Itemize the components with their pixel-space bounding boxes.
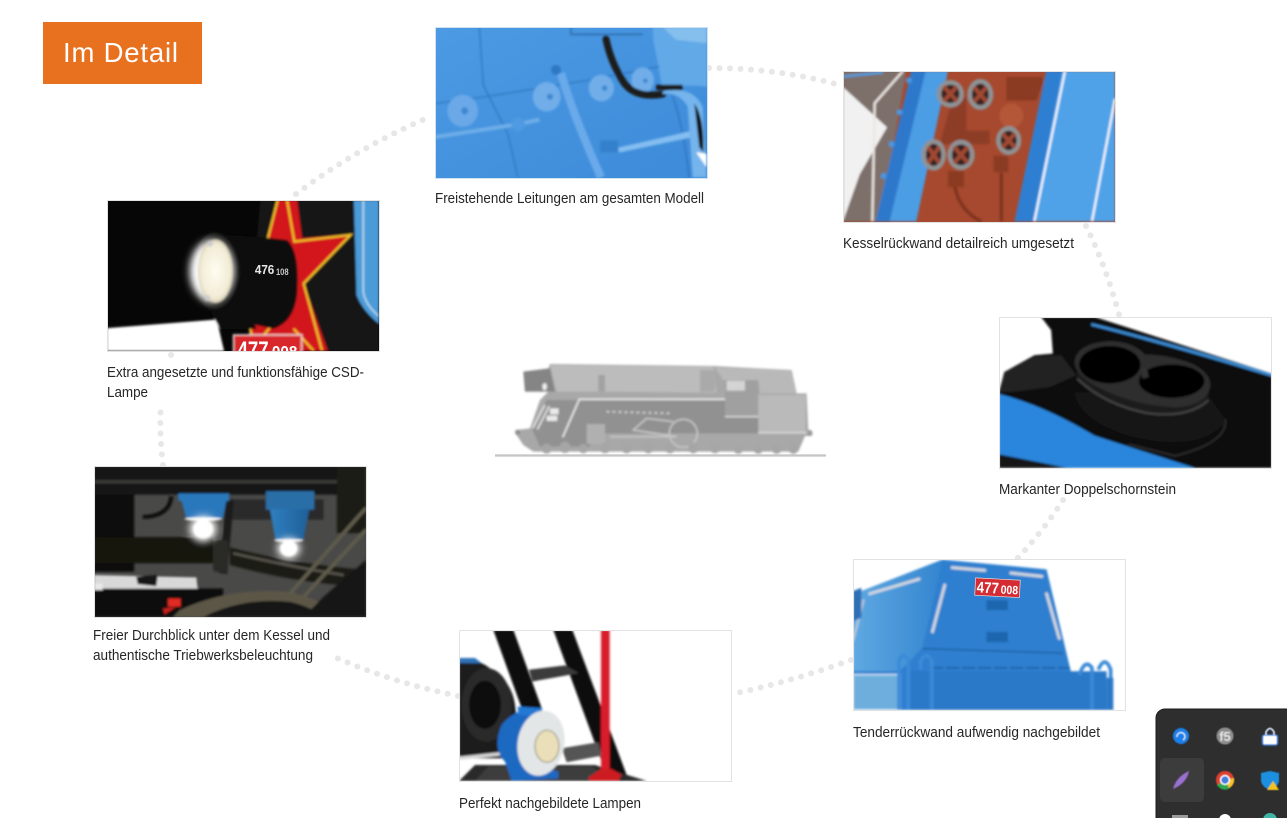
caption: CSD lamp: Lampe	[107, 385, 148, 401]
icon: purple feather	[1173, 771, 1189, 789]
caption: boiler backplate: Kesselrückwand detailreich umgesetzt	[843, 236, 1074, 252]
panel: modelled lamps	[459, 630, 731, 781]
panel: CSD lamp: 477	[237, 337, 269, 363]
caption: running gear lighting	[93, 628, 330, 664]
heading: Im Detail	[43, 22, 202, 84]
caption: pipes: Freistehende Leitungen am gesamten Modell	[435, 191, 704, 207]
caption: CSD lamp	[107, 365, 364, 401]
panel: CSD lamp: 108	[276, 267, 289, 277]
caption: tender rear wall: Tenderrückwand aufwendig nachgebildet	[853, 725, 1100, 741]
panel: pipes on model	[435, 27, 707, 178]
icon: padlock	[1262, 728, 1278, 745]
partial icons	[1172, 813, 1277, 818]
caption: double chimney: Markanter Doppelschornstein	[999, 482, 1176, 498]
panel: boiler backplate	[843, 71, 1115, 222]
icon: blue gauge	[1173, 728, 1189, 744]
number plate: 477	[976, 579, 999, 597]
caption: running gear lighting: authentische Triebwerksbeleuchtung	[93, 648, 313, 664]
number plate	[975, 578, 1020, 599]
caption: running gear lighting: Freier Durchblick unter dem Kessel und	[93, 628, 330, 644]
panel: running gear lighting	[94, 466, 366, 617]
lamp number: 476	[255, 262, 274, 277]
caption: CSD lamp: Extra angesetzte und funktionsfähige CSD-	[107, 365, 364, 381]
icon: chrome	[1216, 771, 1234, 790]
panel: tender rear wall	[853, 559, 1126, 710]
panel: CSD lamp	[107, 200, 379, 363]
icon: security shield warning	[1261, 771, 1279, 790]
locomotive silhouette	[495, 364, 826, 457]
number plate: 008	[1000, 583, 1019, 597]
caption: modelled lamps: Perfekt nachgebildete Lampen	[459, 796, 641, 812]
heading: Im Detail: Im Detail	[63, 37, 178, 68]
panel: CSD lamp: 008	[272, 343, 297, 362]
panel: double chimney	[999, 317, 1272, 468]
system tray overlay	[1156, 709, 1287, 818]
dotted connecting path	[160, 68, 1120, 696]
rim	[1075, 341, 1210, 407]
collar	[1076, 369, 1208, 415]
icon: f5: f5	[1219, 729, 1231, 744]
